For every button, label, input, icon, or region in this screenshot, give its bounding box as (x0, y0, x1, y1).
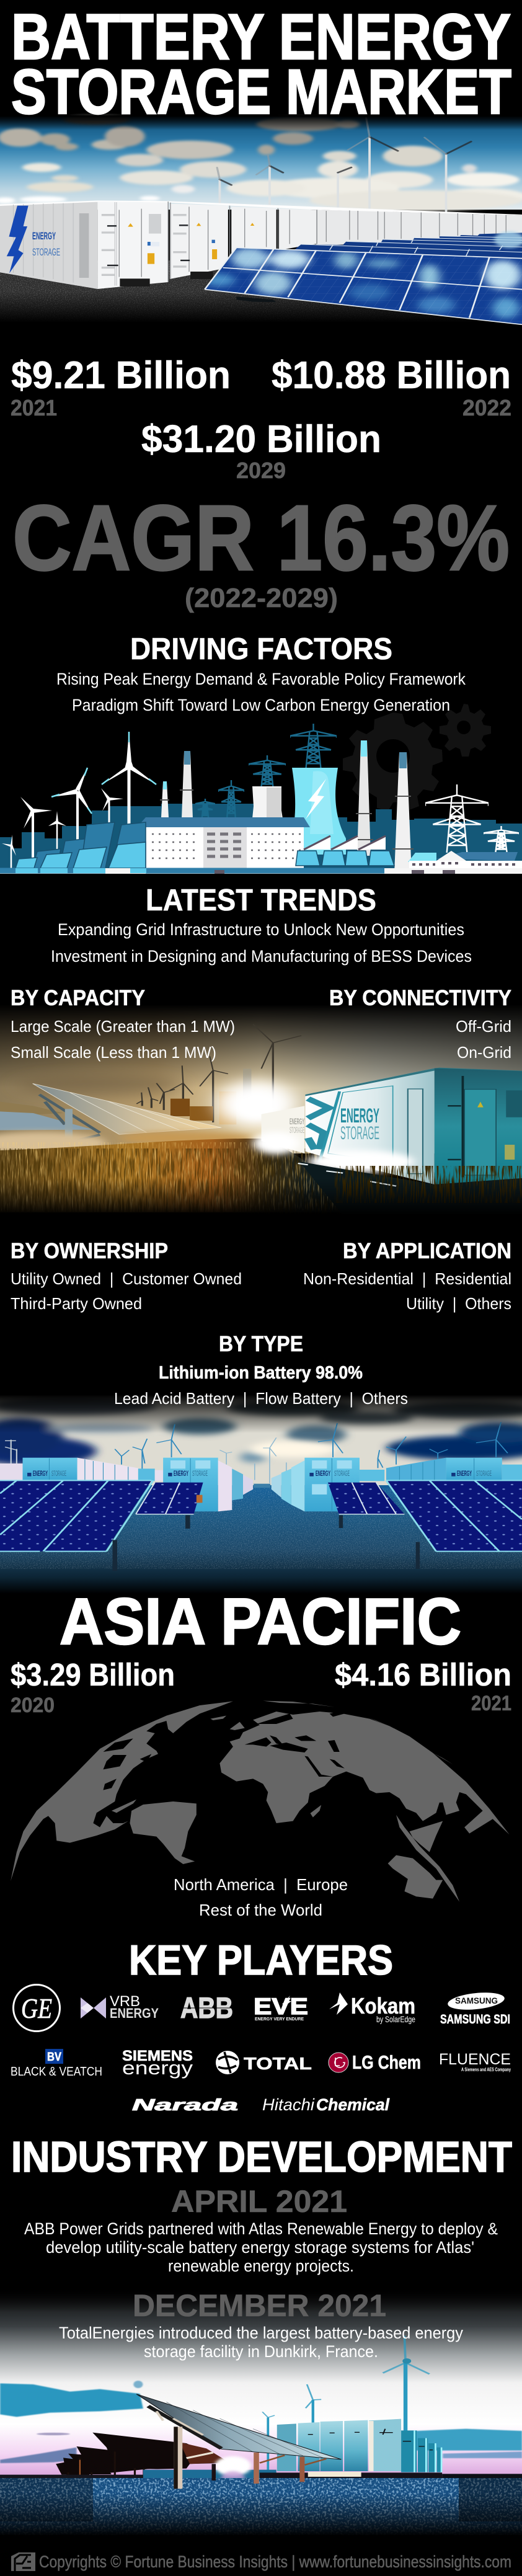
development: April 2021: APRIL 2021 (171, 2184, 347, 2219)
main solar panel (136, 2394, 341, 2489)
illustration: energy generation landscape (0, 704, 522, 874)
base strip (0, 868, 522, 874)
logo: VRB Energy (81, 1993, 159, 2021)
driving factors section: DRIVING FACTORS (130, 633, 392, 666)
gravel ground (0, 260, 522, 338)
other regions: North America | Europe (174, 1875, 348, 1894)
key player logos (11, 1984, 511, 2114)
latest trends section: LATEST TRENDS (146, 884, 376, 917)
logo: LG Chem: LG Chem (352, 2051, 421, 2073)
segment: by ownership: Utility Owned | Customer Owned (11, 1269, 242, 1288)
segment: by ownership: BY OWNERSHIP (11, 1239, 168, 1263)
turbine blade tips (51, 732, 156, 814)
development: April 2021 (24, 2184, 498, 2275)
logo: Samsung SDI (440, 1990, 510, 2027)
container labels: ENERGY (33, 1469, 48, 1478)
Madagascar (310, 1805, 321, 1818)
market value stats: 2021 (11, 395, 57, 420)
containers (0, 200, 522, 327)
segment: by connectivity: BY CONNECTIVITY (329, 986, 511, 1010)
asia pacific heading: ASIA PACIFIC (60, 1585, 461, 1658)
seas (245, 1710, 376, 1803)
arctic islands and Europe fragments (210, 1701, 453, 1764)
far hill and back panel (0, 1102, 63, 1116)
segment: by capacity: Small Scale (Less than 1 MW) (11, 1043, 216, 1062)
market value stats: 2022 (462, 395, 511, 420)
segment: by capacity: BY CAPACITY (11, 986, 145, 1010)
container label: STORAGE (290, 1125, 304, 1135)
container label: STORAGE (32, 246, 60, 258)
sky turbines (5, 1422, 508, 1483)
image: rows of containers and solar panels at dusk (0, 1377, 522, 1594)
segment: by ownership (11, 1239, 242, 1313)
driving factors section (56, 633, 466, 714)
title (11, 1, 511, 127)
logo: Black & Veatch: BV (47, 2051, 61, 2064)
left solar panels (0, 1480, 151, 1552)
segment: by capacity (11, 986, 235, 1062)
segment: by type: Lead Acid Battery | Flow Battery | Others (114, 1389, 408, 1408)
container labels: ENERGY (316, 1469, 330, 1478)
container labels (33, 1469, 492, 1478)
market value stats: $9.21 Billion (11, 354, 231, 397)
segment: by application: Utility | Others (406, 1294, 511, 1313)
development: April 2021: renewable energy projects. (168, 2257, 354, 2275)
asia pacific stats (11, 1657, 511, 1717)
solar panel (33, 1083, 221, 1134)
turbines (262, 2336, 430, 2472)
logo: Kokam: by SolarEdge (376, 2014, 415, 2024)
Eurasia and Africa (219, 1712, 510, 1834)
asia pacific stats: $3.29 Billion (11, 1657, 175, 1692)
container labels: STORAGE (51, 1469, 66, 1478)
segment: by capacity: Large Scale (Greater than 1 MW) (11, 1017, 235, 1036)
Hudson Bay and Great Lakes (103, 1738, 151, 1790)
icon: Fortune Business Insights logo (11, 2552, 35, 2571)
logo: Narada: Narada (132, 2095, 238, 2114)
logo: Fluence: FLUENCE (439, 2051, 511, 2068)
segment: by connectivity (329, 986, 511, 1062)
logo: Hitachi Chemical: Chemical (316, 2095, 389, 2114)
ground (0, 1485, 522, 1594)
logo: Kokam: Kokam (351, 1993, 415, 2019)
city skyline (0, 804, 522, 874)
South America (130, 1801, 197, 1864)
main factory (137, 817, 310, 827)
logo: Hitachi Chemical: Hitachi (262, 2095, 315, 2114)
containers and solar panels (0, 1458, 522, 1571)
image: solar panel, grass field and glowing container: ENERGY (340, 1104, 379, 1127)
storm clouds (0, 1397, 522, 1465)
segment: by connectivity: Off-Grid (456, 1017, 511, 1036)
segment: by ownership: Third-Party Owned (11, 1294, 142, 1313)
key players heading: KEY PLAYERS (129, 1937, 393, 1984)
icon: gears (343, 704, 491, 811)
latest trends section: Expanding Grid Infrastructure to Unlock New Opportunities (58, 920, 464, 939)
dark far solar panels (56, 2433, 228, 2476)
logo: VRB Energy: ENERGY (110, 2005, 159, 2021)
segment: by application: BY APPLICATION (343, 1239, 511, 1263)
horizon strip (0, 2475, 173, 2479)
right solar panels (386, 1480, 522, 1552)
image: rows of containers and solar panels at dusk: STORAGE (476, 1469, 492, 1478)
logo: Hitachi Chemical (262, 2095, 389, 2114)
asia pacific stats: 2021 (471, 1692, 511, 1715)
transmission towers (195, 724, 337, 817)
development: December 2021: storage facility in Dunkirk, France. (144, 2342, 378, 2361)
image: solar panels and batteries at sunset (0, 2287, 522, 2545)
development: December 2021: TotalEnergies introduced the largest battery-based energy (59, 2324, 463, 2342)
clouds (0, 115, 522, 211)
segment: by application: Non-Residential | Residential (303, 1269, 511, 1288)
market value stats: $31.20 Billion (141, 418, 381, 461)
segment: by type: BY TYPE (219, 1332, 303, 1356)
latest trends section: Investment in Designing and Manufacturing of BESS Devices (51, 947, 472, 966)
market value stats: $10.88 Billion (272, 354, 511, 397)
clouds (0, 2383, 143, 2417)
energy storage containers (253, 1068, 522, 1228)
logo: LG Chem (329, 2051, 421, 2073)
segment: by application (303, 1239, 511, 1313)
gravel ground (0, 2478, 522, 2544)
container label (32, 230, 60, 258)
Southeast Asia (396, 1815, 459, 1902)
market value stats: 2029 (236, 458, 286, 483)
logo: GE (14, 1984, 60, 2032)
container labels: ENERGY (457, 1469, 472, 1478)
buildings at right (408, 851, 522, 873)
logo: Samsung SDI: SAMSUNG (455, 1996, 498, 2005)
chimneys (160, 740, 414, 874)
grass field (0, 1139, 366, 1212)
logo: Kokam (329, 1992, 415, 2024)
asia pacific stats: 2020 (11, 1694, 55, 1717)
container labels: STORAGE (334, 1469, 350, 1478)
footer (11, 2552, 511, 2571)
logo: VRB Energy: VRB (110, 1993, 140, 2010)
image: solar panel, grass field and glowing container: STORAGE (340, 1123, 379, 1144)
development: December 2021: DECEMBER 2021 (133, 2288, 386, 2323)
container label: ENERGY (290, 1116, 304, 1126)
driving factors section: Rising Peak Energy Demand & Favorable Policy Framework (56, 670, 466, 688)
container labels: STORAGE (192, 1469, 208, 1478)
logo: ABB: ABB (180, 1991, 233, 2024)
Caribbean islands (112, 1800, 136, 1813)
logo: Black & Veatch: BLACK & VEATCH (11, 2065, 102, 2079)
shed roofs (304, 836, 386, 850)
market value stats (11, 354, 511, 483)
container label: ENERGY (32, 230, 56, 242)
logo: GE: GE (21, 1992, 52, 2024)
development: April 2021: develop utility-scale battery energy storage systems for Atlas' (46, 2238, 474, 2257)
field fog (0, 1132, 107, 1155)
cooling towers (291, 768, 346, 855)
wind turbines (2, 732, 156, 874)
other regions: Rest of the World (199, 1901, 322, 1919)
asia pacific stats: $4.16 Billion (335, 1657, 511, 1692)
driving factors section: Paradigm Shift Toward Low Carbon Energy Generation (72, 696, 450, 714)
logo: EVE: ENERGY VERY ENDURE (255, 2016, 304, 2022)
segment: by type (114, 1332, 408, 1408)
solar arrays (15, 822, 394, 868)
logo: Total: TOTAL (244, 2054, 312, 2073)
segment: by type: Lithium-ion Battery 98.0% (159, 1363, 363, 1383)
segment: by connectivity: On-Grid (457, 1043, 511, 1062)
logo: Siemens Energy (122, 2048, 193, 2079)
development: December 2021 (59, 2288, 463, 2361)
logo: EVE: EVE (254, 1994, 308, 2019)
logo: Siemens Energy: SIEMENS (122, 2048, 193, 2064)
haze (17, 1075, 183, 1096)
image: solar panel, grass field and glowing container (0, 1005, 522, 1233)
Australia (388, 1855, 443, 1899)
other regions (174, 1875, 348, 1919)
CAGR headline: (2022-2029) (185, 583, 338, 613)
latest trends section (51, 884, 472, 966)
turbines and buildings (136, 1024, 301, 1122)
container labels: ENERGY (174, 1469, 188, 1478)
wind turbines (217, 118, 471, 211)
container label (290, 1104, 379, 1144)
logo: Black & Veatch (11, 2049, 102, 2079)
logo: Siemens Energy: energy (122, 2057, 193, 2079)
hero image: battery containers, wind turbines and solar panels (0, 115, 522, 341)
North America and Greenland (11, 1701, 233, 1881)
batteries (277, 2423, 296, 2471)
world globe map (11, 1701, 510, 1902)
logo: Total (216, 2051, 312, 2074)
